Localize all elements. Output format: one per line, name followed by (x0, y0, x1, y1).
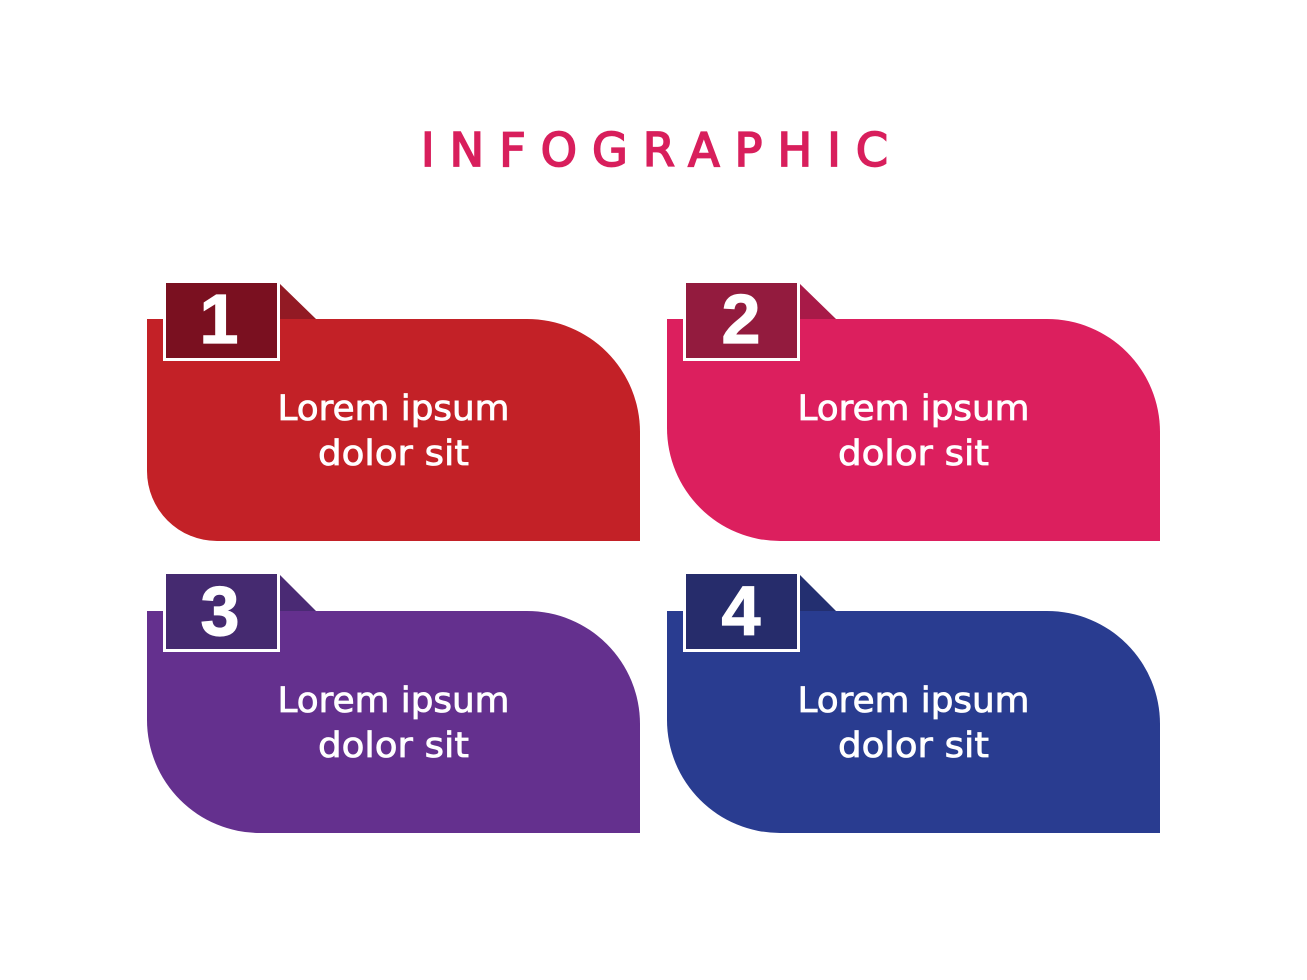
card 2 number: 2 (722, 280, 760, 358)
card 2 background (667, 319, 1160, 541)
card 4 number badge (684, 572, 798, 650)
card 1 text: dolor sit (318, 434, 469, 474)
card 1 background (147, 319, 640, 541)
card 2 text: Lorem ipsum (798, 389, 1030, 429)
card 3 fold (279, 574, 316, 611)
card 3 number: 3 (201, 572, 239, 650)
title: INFOGRAPHIC (421, 123, 888, 177)
panel: card 4 (667, 572, 1160, 833)
card 3 background (147, 611, 640, 833)
panel: card 2 (667, 280, 1160, 541)
card 3 number badge (164, 572, 278, 650)
card 1 fold (279, 283, 316, 319)
panel: card 1 (147, 280, 640, 541)
card 2 text: dolor sit (838, 434, 989, 474)
card 4 fold (799, 574, 836, 611)
card 1 text: Lorem ipsum (278, 389, 510, 429)
card 1 number badge (164, 282, 278, 360)
card 2 number badge (684, 282, 798, 360)
card 4 text: dolor sit (838, 726, 989, 766)
card 4 text: Lorem ipsum (798, 681, 1030, 721)
panel: card 3 (147, 572, 640, 833)
card 3 text: dolor sit (318, 726, 469, 766)
card 3 text: Lorem ipsum (278, 681, 510, 721)
card 1 number: 1 (200, 280, 238, 358)
card 2 fold (799, 283, 836, 319)
card 4 background (667, 611, 1160, 833)
card 4 number: 4 (722, 572, 761, 650)
